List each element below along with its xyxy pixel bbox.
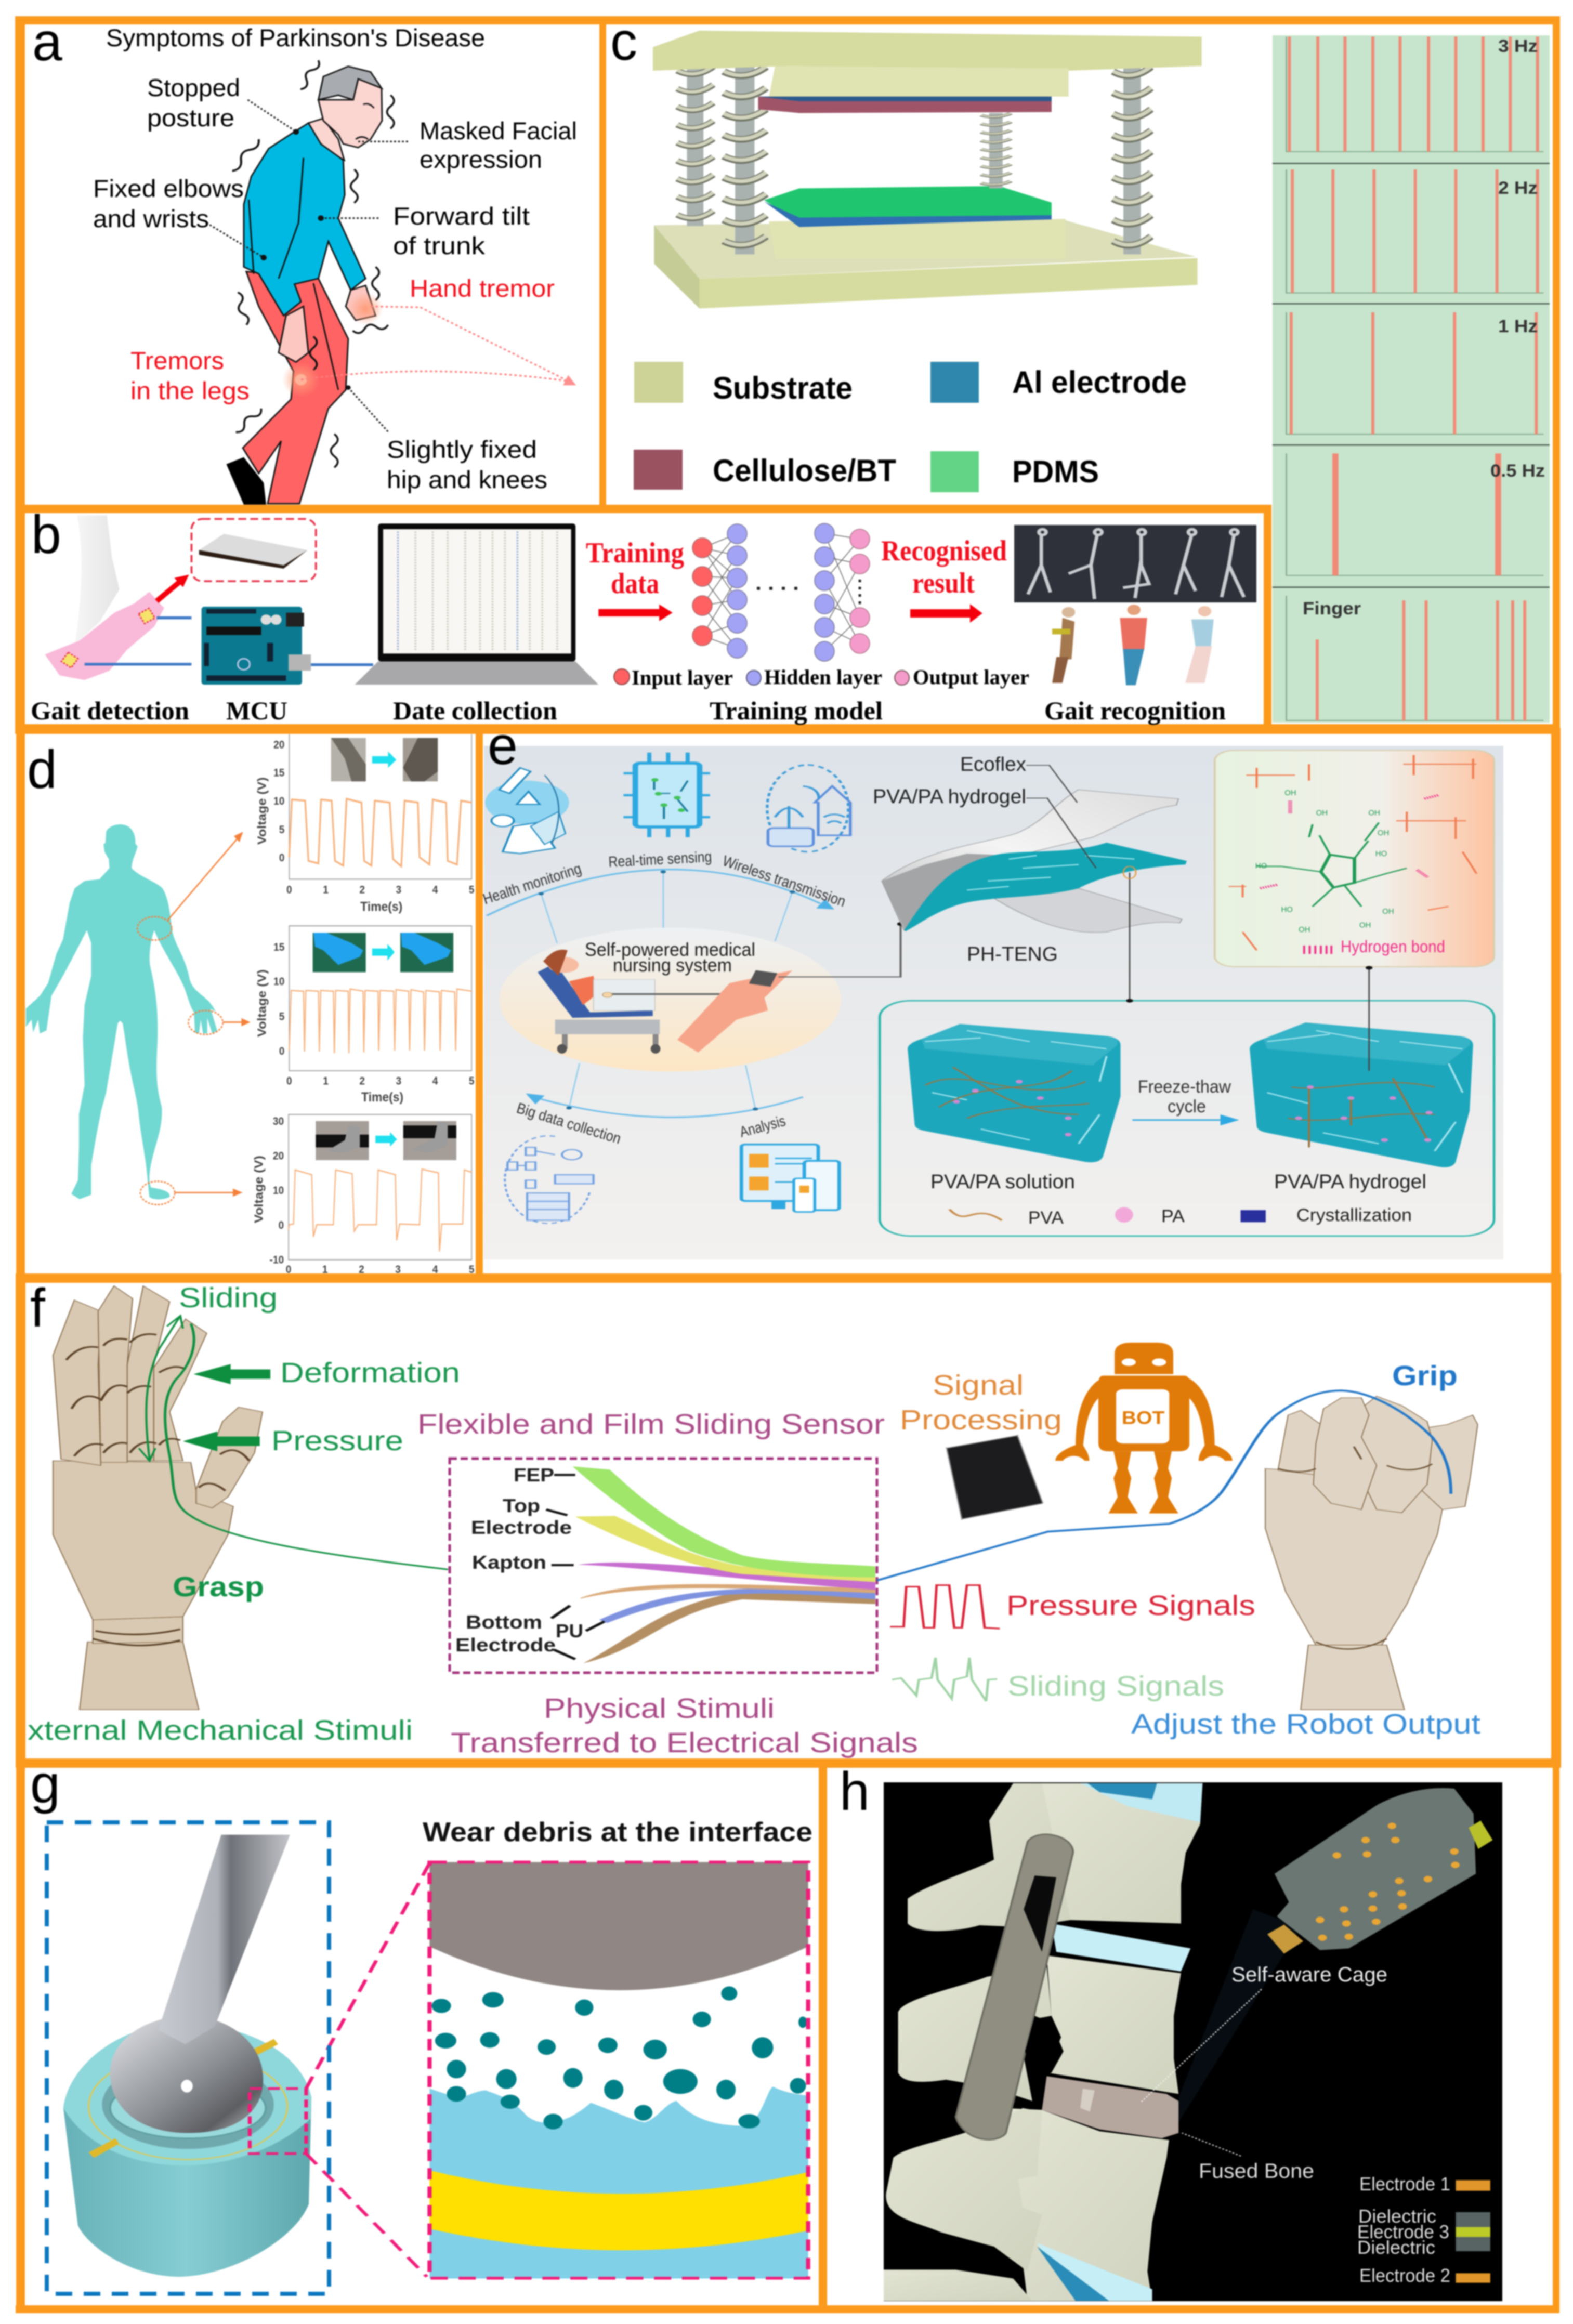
label: PVA/PA hydrogel: PVA/PA hydrogel [873, 786, 1026, 808]
panel c: device structure [610, 11, 1550, 723]
label: 2 Hz: 2 Hz [1498, 178, 1538, 198]
panel letter c: c [610, 11, 637, 72]
chart: elbow voltage: 0 [286, 884, 292, 896]
label: Pressure: Pressure [271, 1425, 403, 1456]
panel letter f: f [30, 1278, 46, 1338]
panel letter d: d [27, 740, 57, 800]
panel g: wear debris [30, 1754, 812, 2294]
neural network diagram [692, 523, 870, 661]
sliding waveform [892, 1658, 997, 1701]
caption: MCU: MCU [226, 696, 287, 725]
label: fixed elbows: Fixed elbows [93, 175, 244, 202]
layer legend: Electrode 3 [1357, 2221, 1449, 2242]
label: Sliding: Sliding [179, 1282, 278, 1314]
chart: finger voltage: Time(s) [361, 1090, 403, 1105]
legend: PDMS: PDMS [1012, 454, 1099, 489]
chart: foot voltage: 20 [273, 1150, 284, 1162]
hydrogen bond box: OH [1359, 921, 1371, 930]
label: of trunk: of trunk [393, 232, 486, 259]
wooden fist [1265, 1396, 1478, 1710]
label: posture: posture [147, 104, 234, 132]
chart: elbow voltage: 1 [323, 884, 329, 896]
hydrogen bond box: OH [1368, 808, 1380, 817]
label: PH-TENG: PH-TENG [967, 943, 1058, 965]
arrow: recognised [910, 604, 982, 623]
chart: elbow voltage: Time(s) [360, 899, 402, 914]
chart: foot voltage: 2 [359, 1264, 364, 1276]
label: Kapton: Kapton [472, 1552, 546, 1573]
hydrogen bond box: OH [1382, 907, 1394, 916]
panel b: gait recognition pipeline [31, 505, 1256, 725]
label: nursing system: nursing system [613, 954, 732, 976]
layer legend: Dielectric [1358, 2205, 1436, 2227]
icon: chip [947, 1436, 1043, 1519]
label: FEP: FEP [514, 1464, 554, 1486]
caption: Adjust the Robot Output: Adjust the Robot Output [1131, 1709, 1480, 1740]
panel letter b: b [31, 505, 61, 565]
network legend: Input layer [632, 666, 733, 689]
chart: finger voltage: 5 [279, 1011, 284, 1023]
label: in the legs: in the legs [130, 377, 250, 404]
caption: Transferred to Electrical Signals: Transferred to Electrical Signals [451, 1727, 918, 1758]
illustration: walking man [206, 59, 576, 505]
label: hip and knees: hip and knees [387, 466, 547, 493]
icon: analysis devices [741, 1145, 839, 1212]
chart: finger voltage: 4 [432, 1075, 438, 1087]
chart: finger voltage: Voltage (V) [256, 969, 269, 1037]
chart: finger voltage: 10 [273, 976, 284, 988]
caption: Date collection: Date collection [393, 696, 557, 725]
implant cage detail [1275, 1788, 1476, 1950]
chart: elbow voltage: 3 [396, 884, 401, 896]
debris interface diagram [429, 1862, 808, 2279]
label: cycle: cycle [1168, 1097, 1206, 1117]
device illustration [653, 31, 1202, 308]
label: Health monitoring: Health monitoring [481, 860, 584, 908]
hydrogen bond box: HO [1281, 905, 1293, 914]
joint model [63, 1835, 429, 2277]
chart: foot voltage: 0 [278, 1219, 284, 1231]
black background [884, 1782, 1502, 2301]
icon: chip [623, 753, 710, 837]
gait people figures [1052, 605, 1214, 685]
legend: cellulose [634, 450, 896, 490]
chart: finger voltage: 15 [273, 941, 284, 953]
chart: elbow voltage: 20 [273, 739, 284, 751]
label: slightly fixed: Slightly fixed [387, 436, 537, 463]
network legend: Hidden layer [764, 665, 882, 689]
caption: Gait detection: Gait detection [31, 696, 189, 725]
label: Grasp: Grasp [173, 1571, 264, 1603]
hydrogen bond box: OH [1299, 925, 1310, 934]
label: forward tilt: Forward tilt [393, 202, 530, 230]
chart: elbow voltage: Voltage (V) [256, 777, 269, 845]
label: data: data [611, 568, 659, 600]
chart: foot voltage: 0 [286, 1264, 291, 1276]
chart: finger voltage: 0 [286, 1075, 292, 1087]
label: Hydrogen bond: Hydrogen bond [1341, 937, 1445, 956]
network legend [614, 665, 1029, 689]
caption: Physical Stimuli: Physical Stimuli [544, 1693, 775, 1724]
label: Fused Bone: Fused Bone [1199, 2160, 1314, 2183]
layer legend [1357, 2173, 1490, 2286]
legend: PA: PA [1161, 1206, 1185, 1226]
label: Electrode bottom: Electrode [455, 1634, 556, 1656]
label: Sliding Signals: Sliding Signals [1007, 1671, 1224, 1702]
heading: wear debris: Wear debris at the interface [423, 1817, 812, 1847]
chart: elbow voltage: 15 [273, 767, 284, 779]
legend: substrate: Substrate [713, 371, 853, 405]
foot, sensor, MCU and laptop [45, 515, 673, 685]
chart: foot voltage: -10 [269, 1254, 284, 1266]
heading: Flexible and Film Sliding Sensor: Flexible and Film Sliding Sensor [417, 1409, 885, 1440]
chart: foot voltage: 4 [432, 1264, 438, 1276]
blue dashed box [47, 1822, 329, 2294]
label: stopped posture: Stopped [147, 74, 240, 101]
legend: Crystallization: Crystallization [1296, 1205, 1412, 1225]
gait skeleton image [1014, 525, 1256, 602]
label: Bottom: Bottom [466, 1611, 542, 1633]
panel d: body monitoring [26, 734, 475, 1276]
panel a: Parkinson's symptoms [32, 12, 577, 505]
label: Pressure Signals: Pressure Signals [1006, 1590, 1255, 1621]
chart: finger voltage: 0 [279, 1045, 284, 1057]
right side group: chip, robot, signals, fist: BOT [1122, 1408, 1164, 1428]
illustrated system [485, 751, 1494, 1236]
spine illustration [884, 1783, 1493, 2301]
chart: finger voltage: 3 [396, 1075, 401, 1087]
label: PVA/PA hydrogel right: PVA/PA hydrogel [1274, 1171, 1426, 1193]
legend: PVA: PVA [1028, 1208, 1064, 1228]
layer legend: Electrode 1 [1359, 2173, 1450, 2195]
nursing ellipse with patient [499, 922, 904, 1071]
panel f: flexible sliding sensor [28, 1278, 1480, 1758]
label: Training: Training [586, 537, 684, 569]
chart: foot voltage: 10 [273, 1185, 284, 1197]
label: Deformation: Deformation [280, 1357, 460, 1388]
panel letter a: a [32, 12, 62, 72]
icon: health monitoring [485, 768, 569, 854]
label: hand tremor: Hand tremor [410, 274, 555, 302]
chart: finger voltage [256, 926, 475, 1105]
label: Processing: Processing [900, 1404, 1062, 1436]
label: Big data collection: Big data collection [515, 1100, 623, 1148]
chart: foot voltage: 1 [322, 1264, 328, 1276]
layer legend: Dielectric [1357, 2237, 1435, 2258]
label: Freeze-thaw: Freeze-thaw [1138, 1077, 1231, 1097]
chart: finger voltage: 5 [469, 1075, 475, 1087]
label: Finger: Finger [1303, 599, 1361, 619]
chart: finger voltage: 1 [323, 1075, 329, 1087]
caption: Gait recognition: Gait recognition [1044, 696, 1226, 725]
chart: foot voltage [252, 1114, 475, 1276]
wooden hand left [53, 1286, 448, 1710]
network legend: Output layer [913, 665, 1029, 689]
body silhouette with arrows [26, 824, 251, 1205]
panel h: spinal implant [840, 1762, 1502, 2301]
pressure waveform [890, 1585, 1000, 1629]
label: Wireless transmission: Wireless transmission [720, 852, 848, 910]
chart: foot voltage: 3 [395, 1264, 401, 1276]
PH-TENG film layers [882, 765, 1187, 933]
hydrogen bond box: HO [1375, 849, 1387, 858]
label: Self-powered medical: Self-powered medical [585, 939, 755, 960]
title: Symptoms of Parkinson's Disease [106, 24, 485, 51]
hydrogen bond box: OH [1378, 829, 1389, 837]
arcs and connectors [487, 870, 820, 1117]
legend: cellulose: Cellulose/BT [713, 453, 896, 488]
layer legend: Electrode 2 [1359, 2265, 1450, 2286]
label: Top: Top [503, 1495, 540, 1516]
label: Signal: Signal [933, 1370, 1024, 1401]
chart: foot voltage: 30 [273, 1115, 284, 1127]
panel letter h: h [840, 1762, 870, 1822]
label: Ecoflex: Ecoflex [960, 754, 1026, 776]
legend: Al electrode: Al electrode [1012, 365, 1187, 400]
label: 1 Hz: 1 Hz [1498, 317, 1538, 336]
label: masked facial: Masked Facial [420, 117, 577, 145]
label: Self-aware Cage: Self-aware Cage [1231, 1963, 1387, 1986]
caption: Training model: Training model [710, 696, 883, 725]
legend: Al electrode [930, 362, 1187, 403]
right side group: chip, robot, signals, fist [877, 1343, 1478, 1710]
chart: elbow voltage: 4 [432, 884, 438, 896]
icon: robot [1055, 1343, 1233, 1513]
icon: big data [505, 1136, 594, 1224]
hydrogen bond box: OH [1284, 789, 1296, 797]
chart: foot voltage: Voltage (V) [252, 1156, 266, 1223]
icon: wireless router [767, 765, 850, 852]
hydrogen bond box [1215, 751, 1494, 967]
label: PVA/PA solution: PVA/PA solution [930, 1171, 1075, 1193]
legend: substrate [634, 362, 853, 405]
label: Electrode: Electrode [471, 1517, 572, 1538]
panel letter g: g [30, 1754, 60, 1815]
label: result: result [912, 567, 975, 599]
background panel [484, 746, 1503, 1259]
sensor layers in dashed box [450, 1459, 877, 1673]
label: Analysis: Analysis [738, 1113, 788, 1141]
chart: finger voltage: 2 [359, 1075, 365, 1087]
PVA/PA box with hydrogel blocks [880, 1001, 1494, 1236]
chart: elbow voltage: 10 [273, 795, 284, 807]
label: tremors: Tremors [130, 347, 224, 374]
panel e: self-powered nursing system [481, 716, 1503, 1259]
chart: elbow voltage: 5 [279, 824, 284, 836]
hydrogen bond box: OH [1316, 808, 1328, 817]
label: and wrists: and wrists [93, 205, 209, 232]
label: Recognised: Recognised [881, 535, 1007, 567]
chart: foot voltage: 5 [469, 1264, 475, 1276]
connector lines [1123, 866, 1372, 1071]
legend: PDMS [930, 451, 1099, 492]
panel letter e: e [488, 716, 518, 776]
label: External Mechanical Stimuli: xternal Mechanical Stimuli [28, 1715, 413, 1746]
label: Grip: Grip [1392, 1360, 1458, 1391]
blue signal wire [877, 1390, 1451, 1581]
label: 0.5 Hz: 0.5 Hz [1490, 461, 1545, 481]
chart: elbow voltage [256, 734, 475, 914]
label: expression: expression [420, 146, 542, 173]
chart: elbow voltage: 5 [469, 884, 475, 896]
label: PU: PU [556, 1620, 583, 1642]
label: Real-time sensing: Real-time sensing [608, 849, 712, 871]
signal charts at 3, 2, 1, 0.5 Hz and finger [1273, 35, 1550, 723]
label: 3 Hz: 3 Hz [1498, 36, 1538, 56]
chart: elbow voltage: 0 [279, 852, 284, 864]
chart: elbow voltage: 2 [359, 884, 365, 896]
hydrogen bond box: HO [1255, 861, 1267, 870]
